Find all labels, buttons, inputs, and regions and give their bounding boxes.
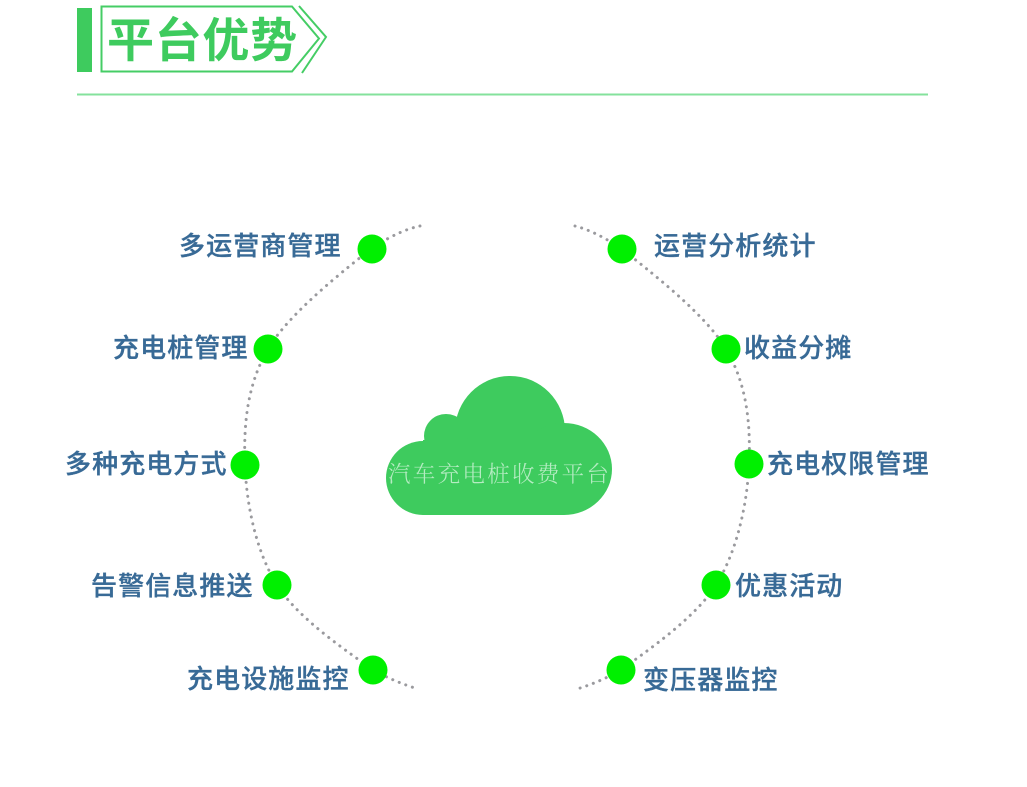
- header: 平台优势: [77, 6, 326, 73]
- left item: 多运营商管理: 多运营商管理: [179, 231, 342, 261]
- right item: 收益分摊: 收益分摊: [744, 333, 852, 363]
- title: 平台优势: [107, 14, 298, 67]
- left item: 充电设施监控: [187, 656, 388, 694]
- right item: 变压器监控: [606, 656, 779, 695]
- header chevron: [299, 6, 326, 73]
- dotted arc: left: [245, 226, 420, 689]
- central cloud: [386, 376, 612, 515]
- header arrow frame: [102, 6, 319, 72]
- left item: 告警信息推送: 告警信息推送: [91, 571, 254, 601]
- left item: 充电设施监控: 充电设施监控: [187, 664, 350, 694]
- right item: 优惠活动: 优惠活动: [735, 571, 843, 601]
- dotted arc: right: [575, 226, 749, 689]
- right item: 充电权限管理: 充电权限管理: [767, 449, 930, 479]
- left item: 充电桩管理: 充电桩管理: [113, 333, 249, 363]
- right item: 变压器监控: 变压器监控: [643, 665, 779, 695]
- left item: 多种充电方式: 多种充电方式: [65, 449, 228, 479]
- cloud shape: [386, 376, 612, 515]
- header accent bar: [77, 8, 92, 72]
- right item: 运营分析统计: 运营分析统计: [654, 231, 817, 261]
- cloud label: 汽车充电桩收费平台: [388, 462, 611, 487]
- header divider: [77, 94, 928, 96]
